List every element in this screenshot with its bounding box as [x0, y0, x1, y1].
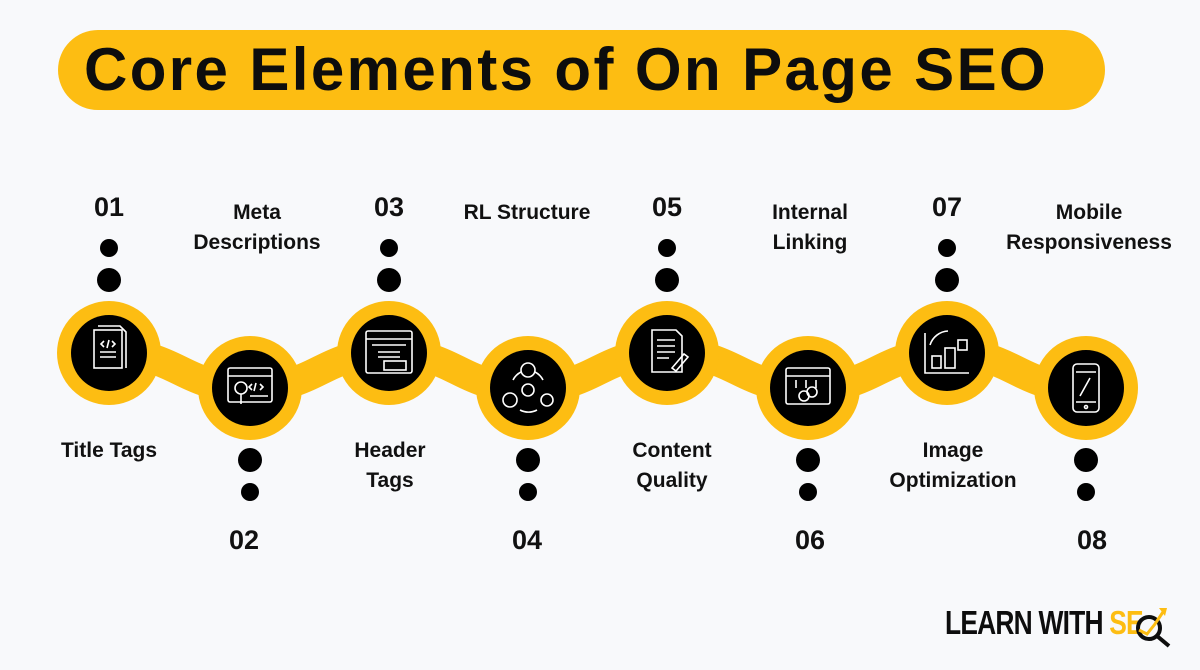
text: Image: [923, 439, 983, 462]
text: Mobile: [1056, 201, 1122, 224]
icon: document: [94, 326, 126, 368]
icon: search code: [228, 368, 272, 404]
text: Meta: [233, 201, 281, 224]
numbers: [94, 192, 1107, 555]
text: Optimization: [889, 469, 1017, 492]
text: 01: [94, 192, 124, 222]
text: Internal: [772, 201, 848, 224]
text: Descriptions: [193, 231, 321, 254]
icon: header browser: [366, 331, 412, 373]
text: Linking: [773, 231, 847, 254]
icon: mobile: [1073, 364, 1099, 412]
icon: content: [652, 330, 688, 372]
title: Core Elements of On Page SEO: [84, 36, 1048, 103]
icon: linking: [786, 368, 830, 404]
text: Content: [632, 439, 712, 462]
icon: image optimization: [925, 331, 969, 373]
text: 08: [1077, 525, 1107, 555]
text: Responsiveness: [1006, 231, 1172, 254]
text: 02: [229, 525, 259, 555]
logo: LEARN WITH SE: [945, 604, 1143, 641]
text: 07: [932, 192, 962, 222]
icon: url structure: [503, 363, 553, 412]
text: Tags: [366, 469, 414, 492]
text: Quality: [636, 469, 708, 492]
text: Header: [354, 439, 426, 462]
text: 06: [795, 525, 825, 555]
text: 04: [512, 525, 542, 555]
text: Title Tags: [61, 439, 157, 462]
text: 05: [652, 192, 682, 222]
text: RL Structure: [464, 201, 590, 224]
labels: [61, 201, 1172, 492]
text: 03: [374, 192, 404, 222]
